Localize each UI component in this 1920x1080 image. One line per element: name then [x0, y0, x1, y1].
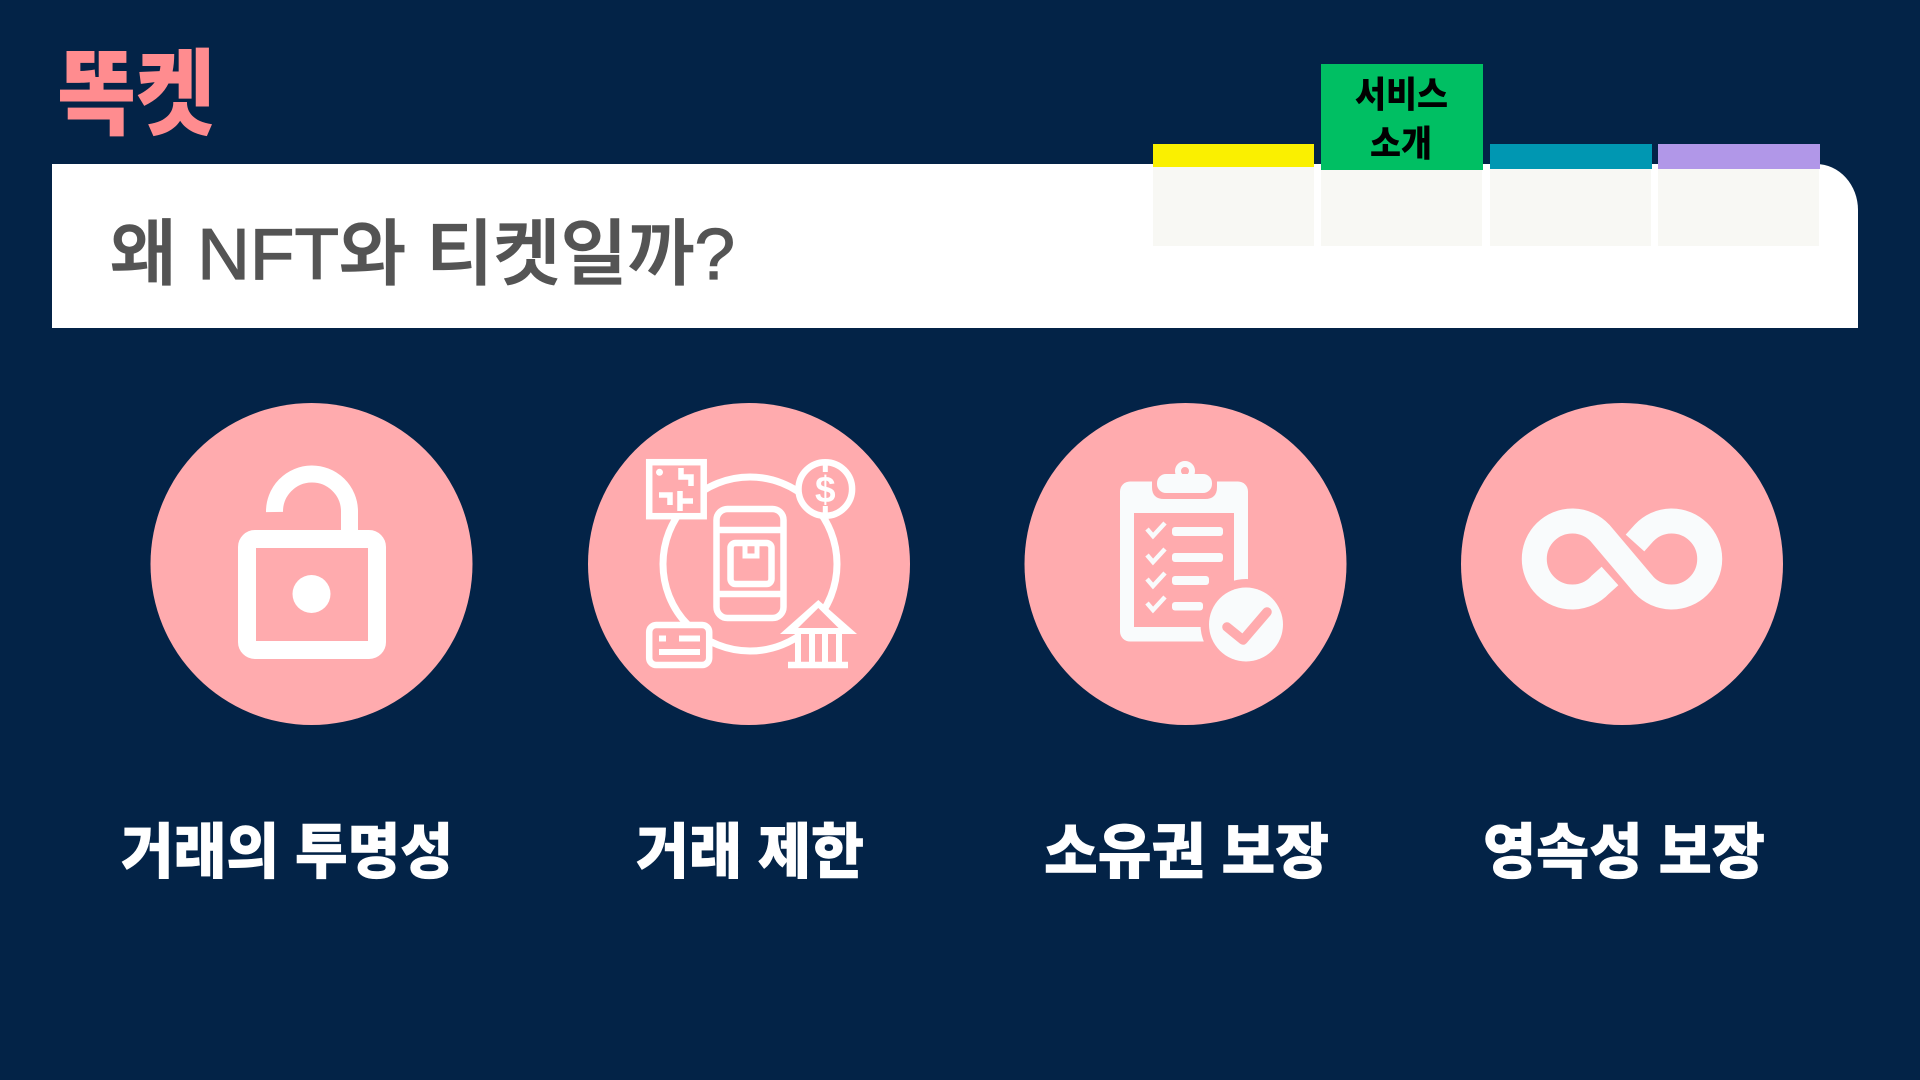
label: permanence guarantee: 영속성 보장: [1483, 819, 1765, 886]
bank building: [780, 600, 857, 665]
checklist rows: [1147, 523, 1223, 610]
logo: 똑켓: [57, 42, 215, 147]
heading: 왜 NFT와 티켓일까?: [110, 215, 735, 295]
icon circle: exchange network: [588, 403, 910, 725]
label: transparency: 거래의 투명성: [121, 819, 453, 886]
tab: service intro active: 서비스: [1355, 74, 1448, 115]
dollar coin: $: [815, 469, 836, 510]
navigation tabs: [1153, 64, 1820, 246]
qr square: [649, 462, 704, 516]
icon circle: open padlock: [150, 403, 472, 725]
tab: teal: [1490, 144, 1652, 246]
phone with parcel: [716, 509, 784, 618]
icon circle: checklist clipboard: [1024, 403, 1346, 725]
tab: service intro active: 소개: [1370, 123, 1432, 164]
icon circle: infinity: [1461, 403, 1783, 725]
tab: purple: [1658, 144, 1820, 246]
panel: header band: [52, 164, 1858, 328]
tab: service intro active: [1321, 64, 1483, 246]
label: ownership guarantee: 소유권 보장: [1044, 819, 1329, 886]
label: trade restriction: 거래 제한: [636, 819, 864, 886]
tab: yellow: [1153, 144, 1314, 246]
dollar coin: [798, 462, 852, 516]
payment card: [649, 625, 709, 665]
